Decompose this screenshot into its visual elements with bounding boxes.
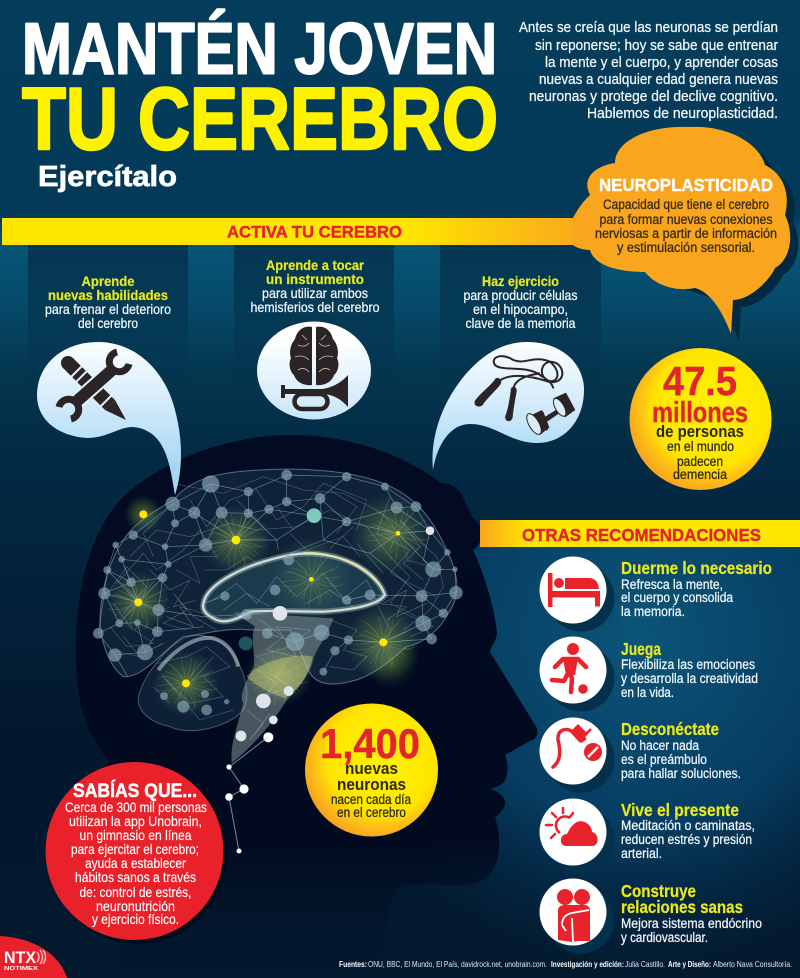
callout: sabias que: neuronutrición [96, 898, 175, 914]
recommendation: duerme: Refresca la mente, [621, 577, 723, 592]
recommendation: duerme: el cuerpo y consolida [621, 590, 733, 605]
credits and sources: Fuentes: [339, 960, 367, 969]
stat: 47.5 millones: demencia [673, 467, 727, 482]
callout: sabias que: utilizan la app Unobrain, [69, 813, 202, 829]
icon: brain [290, 327, 338, 385]
callout: sabias que [46, 762, 227, 944]
text: aprende nuevas habilidades: nuevas habilidades [48, 287, 168, 303]
credits and sources: Julia Castillo. [625, 960, 665, 969]
icon: pencil and wrench [59, 352, 129, 420]
intro text: la mente y el cuerpo, y aprender cosas [545, 55, 778, 71]
icon: jump rope and dumbbell [475, 356, 575, 437]
stat: 47.5 millones: 47.5 [663, 358, 737, 404]
banner: otras recomendaciones [480, 520, 800, 547]
icon: trumpet [281, 375, 348, 409]
brain glow spots [107, 493, 430, 717]
recommendation: juega: Flexibiliza las emociones [621, 657, 755, 672]
banner: activa tu cerebro: ACTIVA TU CEREBRO [227, 222, 402, 242]
stat: 1,400 neuronas: 1,400 [320, 720, 420, 767]
credits and sources: Investigación y edición: [551, 960, 624, 969]
recommendation: desconectate: No hacer nada [621, 738, 699, 753]
grey nodes [93, 470, 463, 715]
text: aprende nuevas habilidades: del cerebro [78, 315, 138, 331]
credits and sources: ONU, BBC, El Mundo, El País, davidrock.net, unobrain.com. [368, 960, 547, 969]
logo: NTX Notimex: NTX [4, 948, 37, 967]
stat: 1,400 neuronas: neuronas [337, 775, 406, 794]
falling neuron chain [225, 737, 268, 854]
intro text [519, 20, 778, 122]
speech bubble: tools [37, 342, 181, 495]
stat: 47.5 millones: de personas [656, 422, 744, 441]
title [22, 10, 498, 193]
speech bubble: exercise gear [432, 342, 584, 470]
icon: bed [540, 556, 614, 632]
callout: sabias que: Cerca de 300 mil personas [65, 799, 207, 815]
text: aprende a tocar un instrumento: para utilizar ambos [262, 285, 368, 301]
credits and sources: Arte y Diseño: [668, 960, 711, 969]
text: aprende a tocar un instrumento [250, 257, 380, 315]
brainstem [231, 612, 333, 763]
brain network illustration [93, 469, 463, 763]
recommendation: desconectate: para hallar soluciones. [621, 766, 741, 781]
credits and sources [339, 960, 792, 969]
callout: sabias que: un gimnasio en línea [80, 827, 192, 843]
recommendation: desconectate: es el preámbulo [621, 752, 707, 767]
neural connections [98, 475, 456, 677]
recommendation: vive el presente: Meditación o caminatas, [621, 818, 755, 833]
intro text: sin reponerse; hoy se sabe que entrenar [535, 38, 778, 54]
recommendation: construye relaciones sanas: y cardiovascular. [621, 930, 708, 945]
text: aprende nuevas habilidades: Aprende [82, 273, 135, 289]
text: haz ejercicio: Haz ejercicio [482, 273, 559, 289]
recommendation: duerme: Duerme lo necesario [621, 558, 772, 578]
text: aprende nuevas habilidades [45, 273, 171, 331]
intro text: Hablemos de neuroplasticidad. [587, 106, 778, 122]
stat: 1,400 neuronas [305, 704, 438, 836]
cerebellum [138, 635, 247, 731]
title: Ejercítalo [38, 161, 177, 193]
neural bursts [108, 507, 430, 712]
callout: sabias que: ayuda a establecer [85, 855, 186, 871]
banner: activa tu cerebro [2, 218, 592, 245]
recommendation: duerme: la memoria. [621, 604, 685, 619]
recommendation: desconectate [540, 718, 741, 792]
yellow nodes [134, 510, 400, 687]
recommendation: construye relaciones sanas: Mejora sistema endócrino [621, 916, 762, 931]
callout: sabias que: SABÍAS QUE... [73, 779, 197, 802]
text: aprende a tocar un instrumento: hemisferios del cerebro [250, 299, 380, 315]
icon: soccer player [540, 636, 614, 712]
recommendation: construye relaciones sanas: Construye [621, 881, 696, 901]
stat: 1,400 neuronas: nacen cada día [331, 792, 411, 807]
recommendation: juega [540, 636, 758, 712]
recommendation: vive el presente: arterial. [621, 846, 662, 861]
callout: sabias que: hábitos sanos a través [75, 869, 196, 885]
cerebrum outline [100, 469, 457, 684]
intro text: neuronas y protege del declive cognitivo. [529, 89, 778, 105]
recommendation: vive el presente: Vive el presente [621, 800, 739, 820]
speech bubble: brain and trumpet [257, 322, 371, 420]
corpus callosum [203, 553, 385, 621]
title: MANTÉN JOVEN [22, 10, 497, 90]
logo: NTX Notimex: NOTIMEX [4, 966, 38, 972]
banner: otras recomendaciones: OTRAS RECOMENDACIONES [522, 525, 761, 545]
recommendation: construye relaciones sanas [540, 878, 762, 954]
recommendation: construye relaciones sanas: relaciones sanas [621, 897, 743, 917]
recommendation: desconectate: Desconéctate [621, 719, 719, 739]
recommendation: vive el presente [540, 798, 755, 874]
callout: neuroplasticidad: NEUROPLASTICIDAD [599, 175, 773, 195]
recommendation: vive el presente: reducen estrés y presión [621, 832, 752, 847]
callout: neuroplasticidad: y estimulación sensorial. [617, 240, 755, 255]
icon: sun and cloud [540, 798, 614, 874]
head silhouette [76, 435, 538, 978]
callout: sabias que: para ejercitar el cerebro; [71, 841, 199, 857]
recommendation: juega: y desarrolla la creatividad [621, 671, 758, 686]
stat: 1,400 neuronas: en el cerebro [337, 805, 406, 820]
stat: 47.5 millones: millones [652, 397, 748, 429]
icon: plug [540, 718, 614, 792]
text: aprende a tocar un instrumento: un instrumento [266, 271, 364, 287]
text: haz ejercicio: en el hipocampo, [473, 301, 568, 317]
intro text: nuevas a cualquier edad genera nuevas [539, 72, 778, 88]
teal node [307, 508, 321, 523]
callout: neuroplasticidad [573, 127, 798, 341]
recommendation: juega: en la vida. [621, 685, 674, 700]
stat: 47.5 millones: padecen [677, 454, 723, 469]
intro text: Antes se creía que las neuronas se perdían [519, 20, 778, 36]
icon: embracing people [540, 878, 614, 954]
callout: neuroplasticidad: Capacidad que tiene el cerebro [603, 197, 769, 212]
texture: callosum and stem fibres [167, 573, 427, 740]
text: aprende a tocar un instrumento: Aprende a tocar [266, 257, 365, 273]
callout: sabias que: y ejercicio físico. [92, 911, 179, 927]
dark teal node [239, 636, 253, 650]
callout: sabias que: de: control de estrés, [80, 884, 192, 900]
callout: neuroplasticidad: para formar nuevas conexiones [600, 212, 773, 227]
white nodes [236, 526, 434, 742]
recommendation: duerme [540, 556, 772, 632]
text: aprende nuevas habilidades: para frenar el deterioro [45, 301, 171, 317]
recommendation: juega: Juega [621, 639, 661, 659]
stat: 1,400 neuronas: nuevas [345, 759, 398, 778]
stat: 47.5 millones [630, 348, 772, 490]
title: TU CEREBRO [22, 69, 498, 168]
logo: NTX Notimex [0, 936, 67, 978]
stat: 47.5 millones: en el mundo [667, 439, 734, 454]
text: haz ejercicio [464, 273, 578, 331]
text: haz ejercicio: para producir células [464, 287, 578, 303]
text: haz ejercicio: clave de la memoria [466, 315, 576, 331]
callout: neuroplasticidad: nerviosas a partir de información [595, 226, 777, 241]
